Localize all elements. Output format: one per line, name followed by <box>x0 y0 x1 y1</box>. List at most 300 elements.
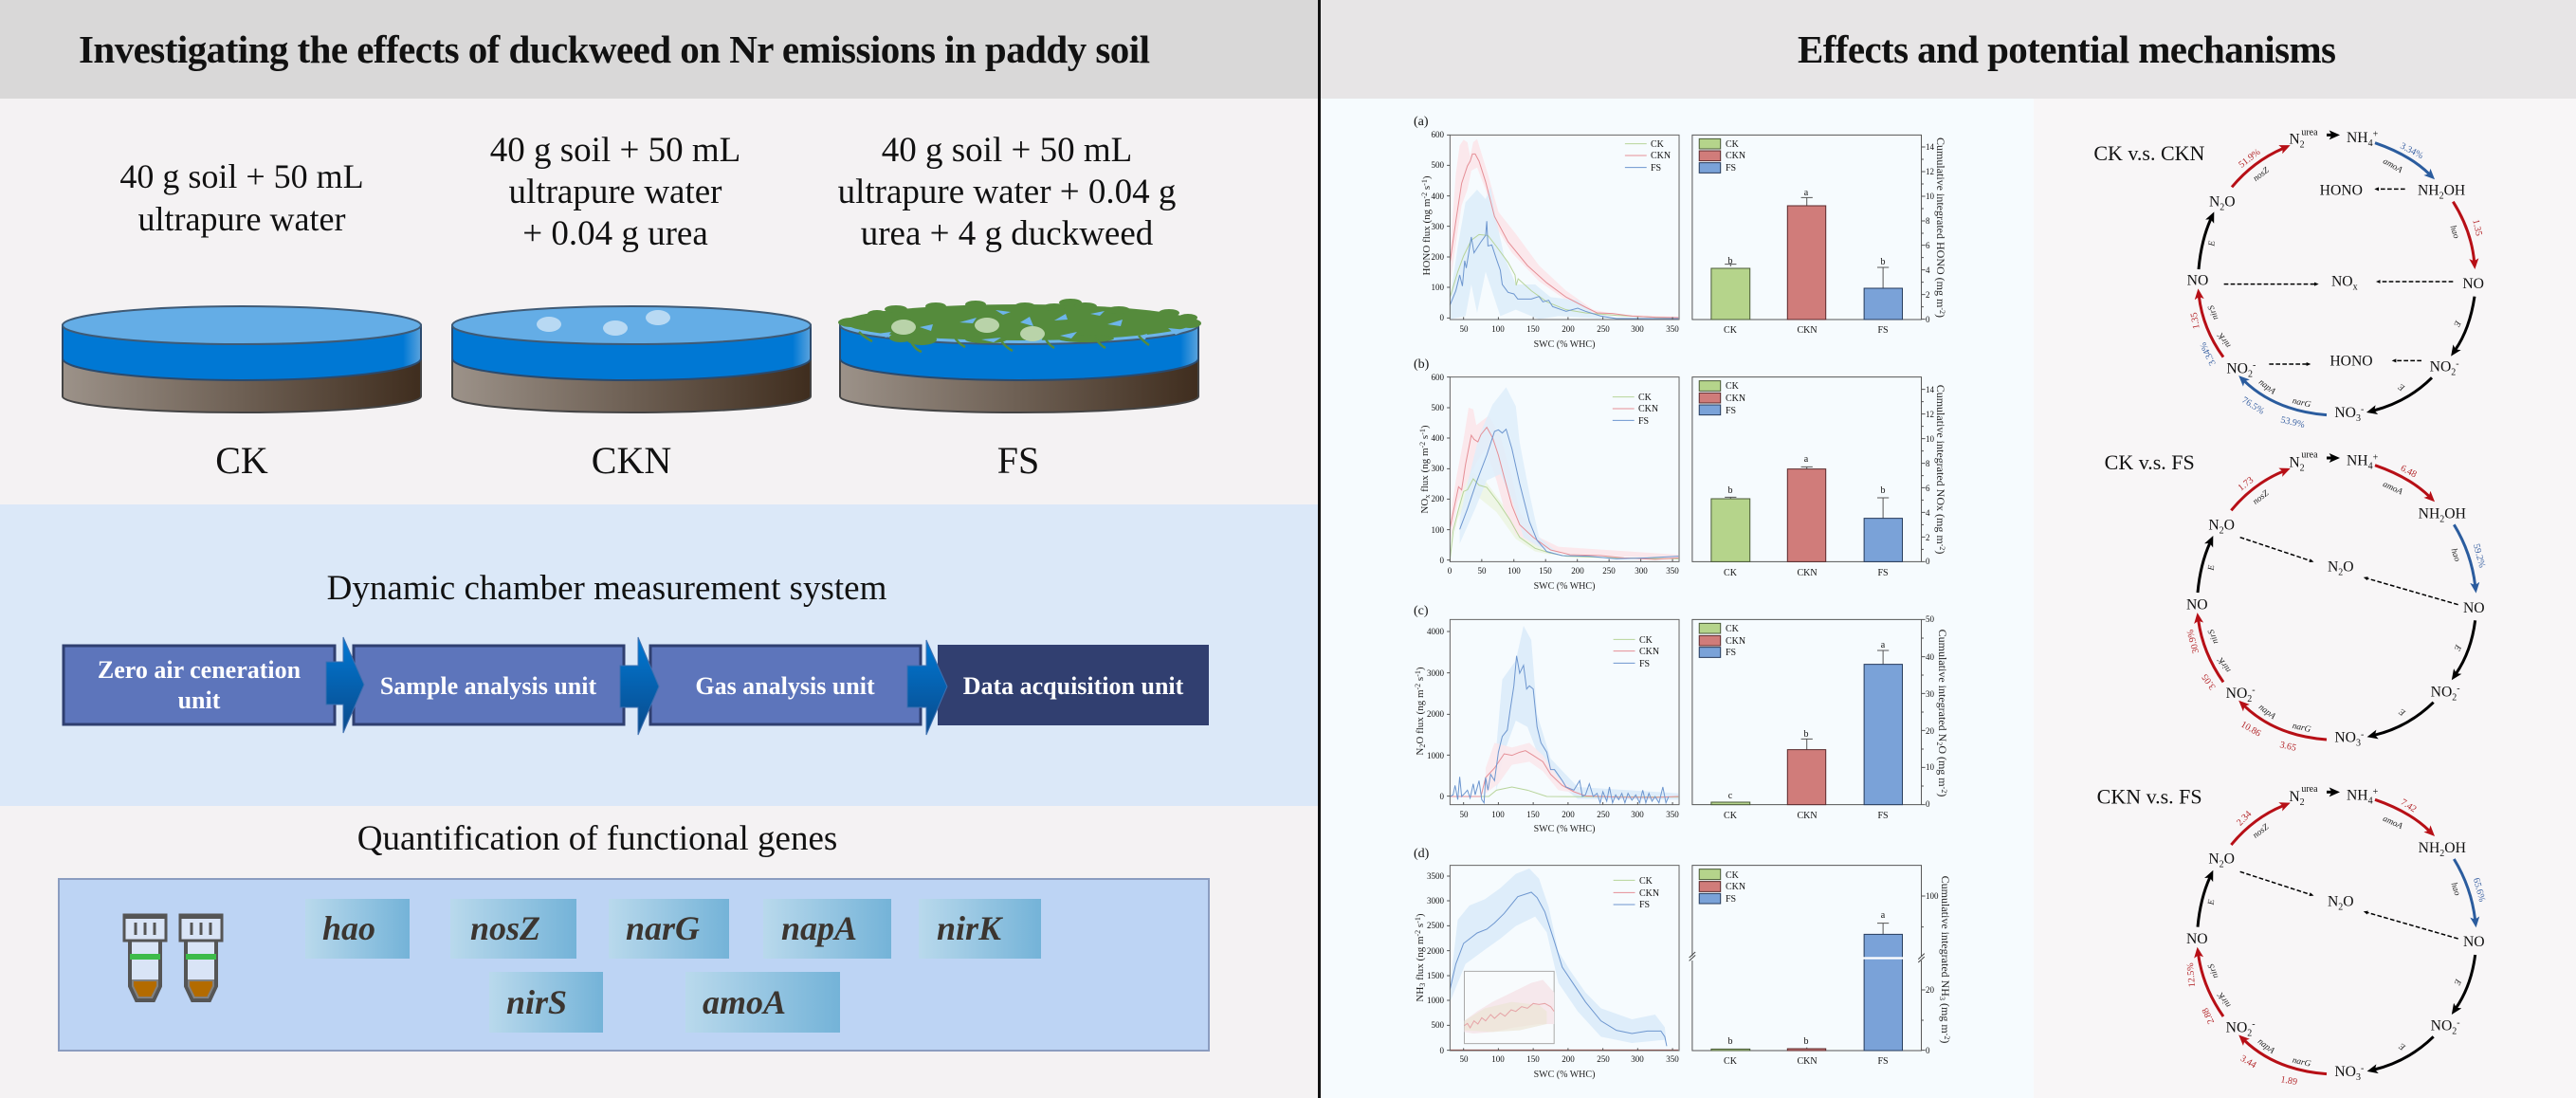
chart text c: FS <box>1639 659 1650 669</box>
compound labels: HONO <box>2320 183 2363 199</box>
compound labels: NH <box>2347 787 2368 803</box>
compound labels: 4 <box>2368 138 2373 149</box>
compound labels: + <box>2373 787 2379 797</box>
compound labels: - <box>2457 684 2460 694</box>
chart text a: 8 <box>1926 216 1930 226</box>
compound labels: 2 <box>2452 1027 2457 1037</box>
chart text b: (b) <box>1414 357 1430 372</box>
chart text c: 200 <box>1562 810 1575 819</box>
diagram: CKN v.s. FS <box>2097 784 2487 1088</box>
gene and value labels: nirK <box>2216 990 2233 1009</box>
compound labels: OH <box>2444 840 2466 856</box>
chart text d: 1000 <box>1427 996 1445 1005</box>
chart text a: 0 <box>1439 313 1445 322</box>
chart text d: a <box>1881 910 1886 921</box>
chart text a: 100 <box>1491 324 1505 334</box>
gene: hao <box>305 899 410 959</box>
gene and value labels: 3.44 <box>2238 1053 2258 1071</box>
chart text a: 300 <box>1432 222 1445 231</box>
compound labels: N <box>2328 559 2338 576</box>
gene: amoA <box>685 972 840 1033</box>
compound labels: 4 <box>2368 796 2373 806</box>
chart text a <box>1414 115 1947 350</box>
chart text c: 50 <box>1460 810 1469 819</box>
gene and value labels: E <box>2452 642 2463 652</box>
chart text c: CK <box>1724 811 1738 821</box>
chart text b: 300 <box>1635 566 1648 576</box>
heading: CKN v.s. FS: CKN v.s. FS <box>2097 784 2202 808</box>
chart text d: CKN <box>1639 888 1659 899</box>
compound labels: 2 <box>2300 463 2305 473</box>
compound labels: NO <box>2226 360 2248 376</box>
chart text b: -2 <box>1418 442 1427 448</box>
title: right: Effects and potential mechanisms <box>1798 27 2336 71</box>
compound labels: - <box>2252 686 2256 696</box>
compound labels: NO <box>2226 1019 2247 1035</box>
gene and value labels <box>2185 464 2487 754</box>
compound labels: NO <box>2334 730 2356 746</box>
chart text d: NH <box>1415 987 1426 1002</box>
gene: narG: narG <box>626 909 700 947</box>
gene and value labels: E <box>2207 240 2218 247</box>
line chart a <box>1447 135 1679 320</box>
chart text c: (c) <box>1414 604 1429 618</box>
compound labels: N <box>2209 193 2220 210</box>
chart text c: ) <box>1415 667 1426 670</box>
chart text b: 6 <box>1926 484 1930 493</box>
gene: nirS: nirS <box>506 983 567 1021</box>
compound labels: 2 <box>2439 849 2444 859</box>
gene and value labels: 1.89 <box>2280 1074 2298 1088</box>
chart text b: FS <box>1638 416 1649 427</box>
chart text a: Cumulative integrated HONO (mg m <box>1934 137 1947 307</box>
gene and value labels: 3.65 <box>2278 740 2297 754</box>
chart text d: ) <box>1939 1039 1952 1043</box>
compound labels: 2 <box>2439 192 2444 202</box>
chart text d: -2 <box>1414 930 1422 936</box>
chart text a: 10 <box>1926 192 1934 201</box>
chart text d: CK <box>1724 1056 1738 1067</box>
chart text c: -2 <box>1414 684 1422 689</box>
chart text a: FS <box>1726 163 1736 174</box>
gene and value labels: 3.05 <box>2200 672 2219 691</box>
compound labels <box>2187 127 2484 424</box>
chart text b: 200 <box>1571 566 1584 576</box>
gene and value labels: E <box>2398 1040 2408 1052</box>
dish: CK <box>63 306 421 412</box>
right header bar <box>1319 0 2576 99</box>
gene and value labels: 2.88 <box>2201 1006 2217 1026</box>
chart text c <box>1414 604 1949 834</box>
chart group (c): N2O <box>1414 604 1949 834</box>
compound labels: 2 <box>2338 902 2343 912</box>
chart text a: 2 <box>1926 290 1930 300</box>
chart text c: SWC (% WHC) <box>1534 824 1595 834</box>
chart text d: FS <box>1726 894 1736 905</box>
dish label: FS: FS <box>997 439 1039 482</box>
chart text b: 350 <box>1666 566 1679 576</box>
chart text a: ) <box>1934 314 1947 318</box>
gene and value labels: E <box>2451 318 2462 328</box>
treatment text: FS <box>838 131 1176 253</box>
chart text c: 2000 <box>1427 709 1445 719</box>
chart text b: -1 <box>1418 429 1427 435</box>
left panel background <box>0 0 1319 1098</box>
chart text b: s <box>1419 435 1431 442</box>
gene and value labels: amoA <box>2381 156 2404 175</box>
bar chart b <box>1692 377 1926 561</box>
chart text a: HONO flux (ng m <box>1421 199 1433 276</box>
chart text d: -2 <box>1943 1034 1951 1039</box>
chart text c: 250 <box>1597 810 1610 819</box>
chart text b: 500 <box>1432 403 1445 412</box>
compound labels: NO <box>2430 359 2451 375</box>
chart text c: 150 <box>1526 810 1540 819</box>
chart text b: 250 <box>1602 566 1616 576</box>
chart text b: 12 <box>1926 410 1934 419</box>
chart text b: FS <box>1877 568 1889 578</box>
compound labels: NO <box>2331 274 2353 290</box>
treatment text: FS: ultrapure water + 0.04 g <box>838 173 1176 211</box>
treatment text: CK <box>119 157 364 238</box>
treatment text: CK: ultrapure water <box>138 200 345 238</box>
compound labels: OH <box>2444 506 2466 522</box>
chart text c: c <box>1728 791 1733 801</box>
unit box: data <box>938 645 1209 725</box>
chart text a: 4 <box>1926 265 1930 275</box>
gene and value labels: napA <box>2256 377 2277 397</box>
chart text b: 10 <box>1926 434 1934 444</box>
chart text d: 20 <box>1926 985 1934 995</box>
gene: nirS <box>489 972 603 1033</box>
chart text a: 12 <box>1926 167 1934 176</box>
compound labels: NH <box>2347 130 2368 146</box>
diagram: CK v.s. CKN <box>2093 127 2484 430</box>
chart text a: SWC (% WHC) <box>1534 339 1595 350</box>
chart text c: CK <box>1726 624 1740 634</box>
compound labels: NO <box>2463 600 2485 616</box>
treatment text: CKN: ultrapure water <box>509 173 722 211</box>
gene and value labels: narG <box>2292 396 2311 410</box>
chart text a: CK <box>1651 139 1665 150</box>
compound labels: 2 <box>2439 515 2444 525</box>
compound labels: N <box>2289 454 2300 470</box>
chart text a: 6 <box>1926 241 1930 250</box>
gene and value labels: amoA <box>2381 480 2404 497</box>
gene and value labels: 7.42 <box>2399 797 2419 814</box>
chart text c: 40 <box>1926 652 1934 662</box>
title: left: Investigating the effects of duckweed on Nr emissions in paddy soil <box>79 27 1150 71</box>
chart text d: 100 <box>1491 1054 1505 1064</box>
chart text a: -2 <box>1938 307 1946 314</box>
chart text c: 350 <box>1666 810 1679 819</box>
gene and value labels: nirK <box>2216 654 2233 674</box>
chart text b: b <box>1881 485 1885 496</box>
gene: hao: hao <box>322 909 375 947</box>
compound labels: 2 <box>2220 860 2224 870</box>
chart text a: CKN <box>1797 325 1818 336</box>
chart text c: s <box>1415 677 1426 684</box>
treatment text: CKN: + 0.04 g urea <box>522 214 708 253</box>
cycle arrows <box>2198 792 2476 1074</box>
gene and value labels: nosZ <box>2252 822 2272 841</box>
chart text b: 100 <box>1507 566 1521 576</box>
gene and value labels <box>2185 797 2487 1088</box>
bar chart d <box>1689 866 1926 1051</box>
chart text b: 4 <box>1926 508 1930 518</box>
unit box: gas: Gas analysis unit <box>695 672 875 700</box>
chart text d: flux (ng m <box>1415 936 1426 983</box>
gene and value labels: 12.5% <box>2185 962 2198 988</box>
dish label: CK: CK <box>215 439 268 482</box>
gene and value labels: E <box>2207 564 2217 572</box>
chart text c: 2 <box>1935 741 1944 745</box>
chart text a: s <box>1421 186 1433 192</box>
chart text d: b <box>1727 1036 1733 1047</box>
gene and value labels: 51.9% <box>2237 147 2262 171</box>
compound labels: O <box>2343 893 2354 909</box>
compound labels: - <box>2252 1019 2256 1030</box>
chart text b: NO <box>1419 499 1431 514</box>
gene: nirK <box>919 899 1041 959</box>
unit box: zero air: Zero air ceneration <box>98 656 301 684</box>
compound labels: 3 <box>2356 739 2361 749</box>
compound labels: N <box>2289 789 2300 805</box>
gene and value labels: nosZ <box>2252 165 2272 184</box>
gene and value labels: narG <box>2292 722 2311 735</box>
compound labels: OH <box>2444 183 2465 199</box>
gene and value labels: 59.2% <box>2471 542 2487 569</box>
gene and value labels: nirS <box>2206 303 2220 321</box>
gene and value labels: 3.34% <box>2198 340 2219 367</box>
gene and value labels: napA <box>2256 1037 2276 1056</box>
heading: CK v.s. CKN: CK v.s. CKN <box>2093 141 2205 165</box>
chart text a: a <box>1804 188 1809 198</box>
chart text c: 300 <box>1631 810 1644 819</box>
compound labels <box>2186 784 2485 1083</box>
gene and value labels: E <box>2452 977 2463 986</box>
chart group (a): HONO <box>1414 115 1947 350</box>
chart text a: 300 <box>1631 324 1644 334</box>
chart text a: 200 <box>1432 252 1445 262</box>
chart text b: 0 <box>1439 556 1445 565</box>
compound labels: NO <box>2462 276 2484 292</box>
compound labels: 2 <box>2451 368 2456 378</box>
compound labels: x <box>2353 283 2358 293</box>
unit box: data: Data acquisition unit <box>963 672 1184 700</box>
chart column background <box>1319 99 2034 1098</box>
compound labels: urea <box>2301 127 2318 137</box>
chart text b: CK <box>1724 568 1738 578</box>
cycle arrows <box>2198 458 2476 740</box>
unit box: gas <box>650 646 921 724</box>
chart text d: 0 <box>1926 1046 1930 1055</box>
chart text c: 4000 <box>1427 627 1445 636</box>
chart text c: b <box>1803 729 1809 740</box>
gene and value labels: E <box>2398 706 2408 718</box>
chart text d: 100 <box>1926 891 1939 901</box>
compound labels: + <box>2373 130 2379 140</box>
chart text c: FS <box>1877 811 1889 821</box>
compound labels: O <box>2224 193 2236 210</box>
chart text b: 50 <box>1477 566 1487 576</box>
chart text a: CK <box>1724 325 1738 336</box>
gene: napA <box>763 899 891 959</box>
gene and value labels: amoA <box>2381 814 2404 832</box>
chart text c: FS <box>1726 648 1736 658</box>
chart text d: CK <box>1726 870 1740 881</box>
unit box: sample: Sample analysis unit <box>380 672 596 700</box>
chart text b: 0 <box>1448 566 1452 576</box>
chart text a: CK <box>1726 139 1740 150</box>
chart text a: 200 <box>1562 324 1575 334</box>
chart text c: 1000 <box>1427 751 1445 760</box>
arrow 2 <box>620 637 659 735</box>
chart text b: CKN <box>1797 568 1818 578</box>
gene and value labels: 1.73 <box>2237 475 2256 493</box>
arrow 1 <box>326 637 364 733</box>
chart group (b): NOx <box>1414 357 1947 592</box>
gene and value labels: 30.9% <box>2185 629 2201 654</box>
chart text c: O (mg m <box>1936 745 1949 787</box>
heading: CK v.s. FS: CK v.s. FS <box>2105 450 2195 474</box>
gene and value labels: narG <box>2292 1056 2311 1070</box>
chart text a: CKN <box>1726 151 1745 161</box>
compound labels: NO <box>2463 934 2485 950</box>
chart text d: (mg m <box>1939 1000 1952 1034</box>
panel: genes <box>59 879 1209 1051</box>
compound labels: 2 <box>2247 1028 2252 1038</box>
chart text a: (a) <box>1414 115 1429 129</box>
dashed emission arrows <box>2224 189 2453 364</box>
chart text c: 0 <box>1926 799 1930 809</box>
chart text c: 30 <box>1926 689 1934 699</box>
chart text b: 8 <box>1926 459 1930 468</box>
inset chart d <box>1464 971 1554 1044</box>
compound labels: 2 <box>2300 140 2305 151</box>
gene: narG <box>609 899 729 959</box>
chart text a: 500 <box>1432 160 1445 170</box>
gene: nirK: nirK <box>937 909 1004 947</box>
bar chart a <box>1692 135 1926 320</box>
panel: dynamic chamber measurement system <box>0 504 1318 806</box>
compound labels: 3 <box>2356 1072 2361 1083</box>
chart text a: FS <box>1877 325 1889 336</box>
gene and value labels: 2.34 <box>2235 809 2254 828</box>
chart text d: 150 <box>1526 1054 1540 1064</box>
dish: CKN <box>452 306 811 412</box>
compound labels: - <box>2361 405 2364 415</box>
chart text c: 100 <box>1491 810 1505 819</box>
chart text d: b <box>1803 1036 1809 1047</box>
gene and value labels: napA <box>2256 703 2277 722</box>
gene and value labels: nosZ <box>2252 488 2272 507</box>
compound labels: HONO <box>2329 353 2373 369</box>
compound labels: N <box>2208 851 2220 868</box>
compound labels: NO <box>2226 686 2247 702</box>
chart text d: 500 <box>1432 1020 1445 1030</box>
chart text d: ) <box>1415 913 1426 917</box>
chart text d: 3000 <box>1427 896 1445 906</box>
gene and value labels: hao <box>2448 882 2461 897</box>
gene: nosZ <box>450 899 576 959</box>
chart text b: CKN <box>1638 404 1658 414</box>
unit box: zero air <box>64 646 335 724</box>
chart text d: SWC (% WHC) <box>1534 1070 1595 1080</box>
chart text b: ) <box>1934 550 1947 554</box>
compound labels: N <box>2289 132 2300 148</box>
compound labels: N <box>2328 893 2338 909</box>
gene and value labels: nirK <box>2216 330 2233 349</box>
chart text b <box>1414 357 1947 592</box>
chart group (d): NH3 <box>1414 847 1952 1080</box>
chart text b: 2 <box>1926 533 1930 542</box>
chart text b: b <box>1727 485 1733 496</box>
chart text c: CKN <box>1797 811 1818 821</box>
chart text d: 2500 <box>1427 921 1445 930</box>
compound labels: 2 <box>2220 202 2224 212</box>
chart text c: Cumulative integrated N <box>1936 630 1949 741</box>
gene and value labels: 65.6% <box>2471 877 2487 903</box>
gene and value labels: 10.86 <box>2238 720 2262 739</box>
gene and value labels: E <box>2397 381 2407 393</box>
icon: tube 1 <box>124 914 166 1000</box>
chart text d: 2000 <box>1427 946 1445 956</box>
chart text d: 1500 <box>1427 971 1445 980</box>
gene and value labels: 76.5% <box>2239 395 2266 417</box>
chart text d <box>1414 847 1952 1080</box>
chart text d: Cumulative integrated NH <box>1939 876 1952 997</box>
compound labels: urea <box>2301 784 2318 795</box>
chart text d: 300 <box>1631 1054 1644 1064</box>
chart text d: 250 <box>1597 1054 1610 1064</box>
chart text b: 100 <box>1432 525 1445 535</box>
chart text b: flux (ng m <box>1419 448 1431 495</box>
chart text b: 600 <box>1432 373 1445 382</box>
gene and value labels: hao <box>2448 547 2461 563</box>
gene and value labels: 53.9% <box>2279 415 2306 430</box>
gene: nosZ: nosZ <box>470 909 540 947</box>
heading: functional genes: Quantification of functional genes <box>357 819 837 858</box>
chart text a: CKN <box>1651 151 1671 161</box>
chart text b: CK <box>1638 393 1653 403</box>
unit box: zero air: unit <box>178 686 221 714</box>
chart text d: FS <box>1639 900 1650 910</box>
compound labels: 2 <box>2220 525 2224 536</box>
gene and value labels: 1.35 <box>2189 312 2202 330</box>
compound labels: + <box>2373 452 2379 463</box>
compound labels: NO <box>2187 273 2208 289</box>
chart text a: 600 <box>1432 130 1445 139</box>
chart text a: 150 <box>1526 324 1540 334</box>
chart text b: 400 <box>1432 433 1445 443</box>
chart text c: CK <box>1639 635 1653 646</box>
chart text b: CKN <box>1726 393 1745 404</box>
icon: tube 2 <box>180 914 222 1000</box>
chart text a: 0 <box>1926 315 1930 324</box>
left header bar <box>0 0 1319 99</box>
gene and value labels: nirS <box>2206 962 2220 979</box>
chart text a: -2 <box>1420 192 1429 199</box>
chart text b: -2 <box>1938 544 1946 550</box>
compound labels <box>2186 450 2485 749</box>
mechanism column background <box>2034 99 2576 1098</box>
compound labels: N <box>2208 517 2220 533</box>
treatment text: CKN: 40 g soil + 50 mL <box>490 131 740 170</box>
chart text b: 300 <box>1432 464 1445 473</box>
compound labels: 2 <box>2247 694 2252 705</box>
chart text c: -2 <box>1940 787 1948 793</box>
